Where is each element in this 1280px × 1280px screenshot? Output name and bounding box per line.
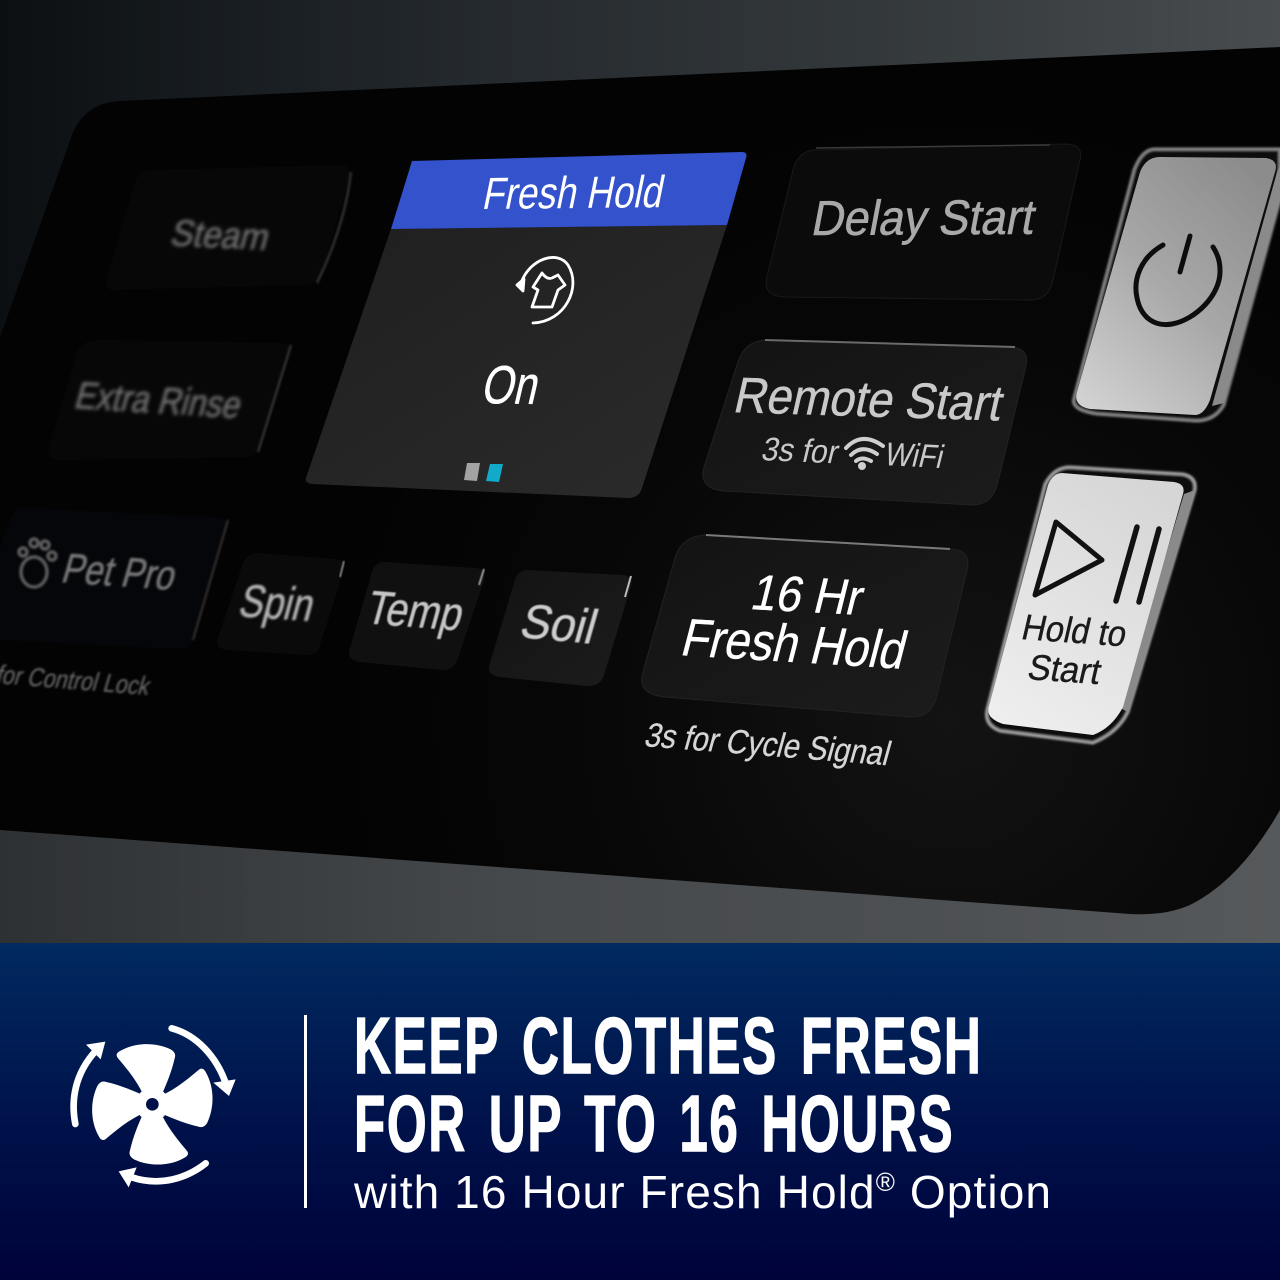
display header: Fresh Hold: [391, 152, 746, 229]
button: Remote Start: 3s for: [758, 432, 843, 471]
subheading: with 16 Hour Fresh Hold: [354, 1166, 875, 1218]
button: 16 Hr Fresh Hold: 16 Hr: [746, 564, 870, 626]
button: Delay Start: Delay Start: [808, 190, 1040, 246]
washer body top surface: [0, 0, 1280, 480]
divider: [304, 1015, 307, 1208]
washer body lower surface: [0, 780, 1280, 950]
button: power: [1073, 149, 1280, 421]
button: Remote Start: Remote Start: [730, 367, 1009, 431]
subheading: ®: [876, 1167, 895, 1197]
icon: paw: [19, 539, 56, 587]
play button face: [988, 473, 1184, 735]
headline: [354, 1002, 982, 1169]
button: 16 Hr Fresh Hold: [642, 535, 968, 717]
icon: shirt with circular arrow: [517, 257, 573, 323]
icon: power symbol: [1136, 236, 1220, 325]
caption: 3s for Cycle Signal: 3s for Cycle Signal: [641, 717, 895, 773]
footer band: [0, 943, 1280, 1280]
button: Temp: Temp: [361, 582, 470, 641]
subheading: Option: [896, 1166, 1051, 1218]
button: Pet Pro: [0, 508, 228, 649]
icon: wifi: [846, 439, 883, 468]
page indicators: [464, 463, 503, 482]
icon: pause bars: [1116, 527, 1159, 602]
button: Delay Start: [766, 144, 1081, 300]
button: Extra Rinse: [48, 340, 291, 460]
headline: KEEP CLOTHES FRESH: [354, 1002, 982, 1091]
icon: play triangle: [1035, 522, 1102, 595]
black control panel: [0, 47, 1280, 914]
icon: fan with rotating arrows: [74, 1028, 236, 1187]
button: Soil: Soil: [515, 595, 604, 654]
button: play pause: [987, 467, 1195, 743]
button: Remote Start: WiFi: [881, 437, 948, 476]
headline: FOR UP TO 16 HOURS: [354, 1080, 954, 1169]
button: Soil: [489, 570, 632, 686]
button: Spin: Spin: [234, 575, 321, 631]
power button face: [1076, 157, 1276, 415]
button: Steam: Steam: [167, 212, 275, 258]
button: Temp: [349, 562, 485, 670]
button: Spin: [217, 553, 345, 655]
power button side bevel: [1212, 165, 1280, 406]
button: Remote Start: [703, 340, 1027, 505]
label: Hold to Start: [1018, 607, 1131, 692]
button: Steam: [106, 165, 351, 290]
button: Pet Pro: Pet Pro: [57, 545, 182, 599]
label: Hold to Start: Start: [1024, 647, 1105, 692]
button: 16 Hr Fresh Hold: Fresh Hold: [676, 609, 913, 680]
LCD display: [306, 152, 746, 498]
label: Hold to Start: Hold to: [1018, 607, 1131, 654]
play button side bevel: [1120, 490, 1195, 712]
display header: Fresh Hold: Fresh Hold: [479, 166, 669, 219]
button: Extra Rinse: Extra Rinse: [71, 375, 247, 427]
display value: On: On: [477, 355, 546, 416]
